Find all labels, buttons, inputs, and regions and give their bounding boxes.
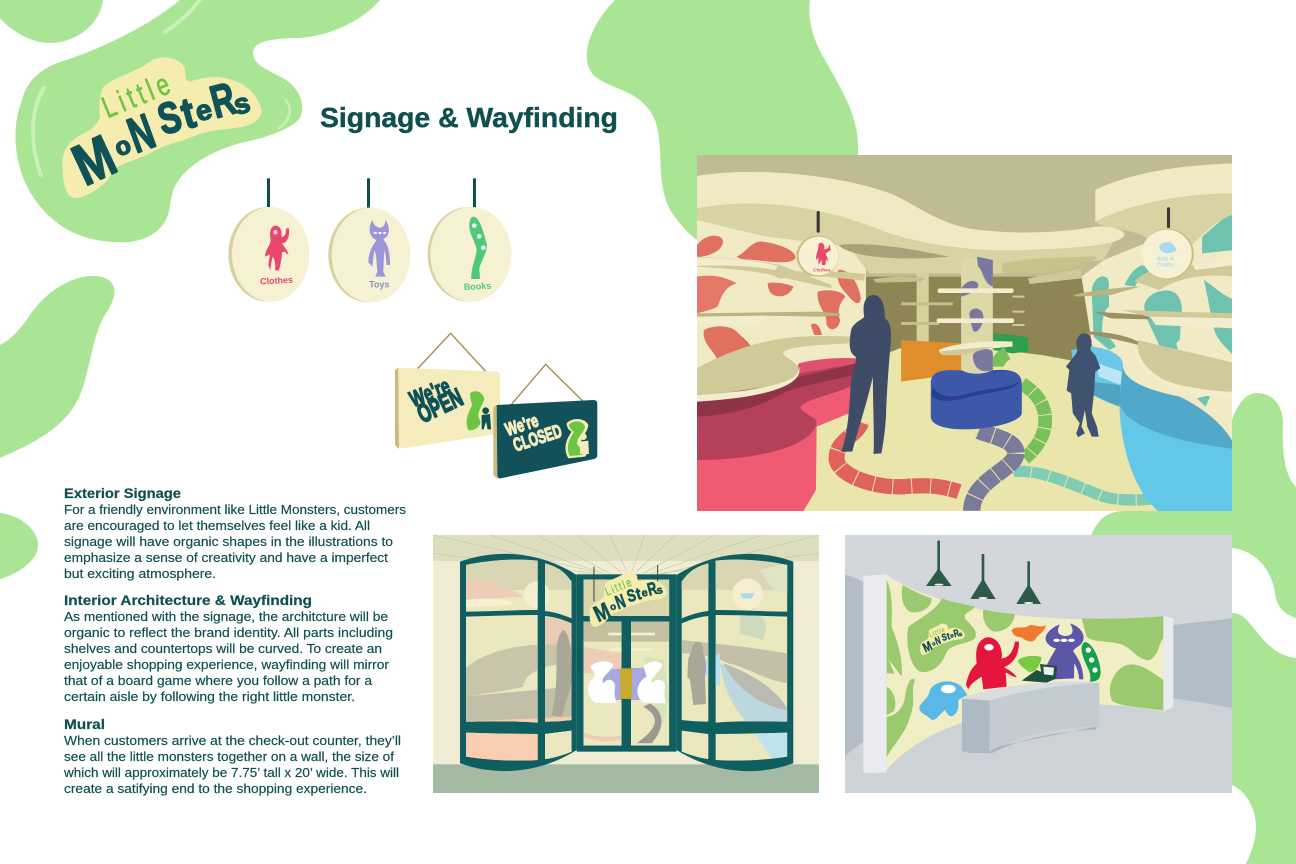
body: Mural: When customers arrive at the check-out counter, they’ll: [64, 734, 401, 748]
right countertop: [1135, 340, 1235, 398]
wayfinding path: green: [997, 353, 1045, 458]
logo: Little Monsters: e: [192, 93, 215, 128]
ceiling rays: [433, 535, 819, 575]
storefront logo sign: Little: [603, 576, 634, 599]
body: Interior Architecture & Wayfinding: [64, 610, 393, 704]
green block: [994, 333, 1028, 353]
title: Signage & Wayfinding: [320, 102, 618, 133]
body: Mural: create a satifying end to the shopping experience.: [64, 782, 367, 796]
sign: We're Open: [395, 333, 500, 449]
pendant lamps: [926, 541, 1041, 604]
sign: Toys: Toys: [369, 279, 389, 289]
mural logo: Little: [929, 627, 946, 639]
mural logo: t: [946, 631, 951, 642]
mural logo: o: [931, 641, 937, 648]
sign: Arts and Crafts interior: Arts &: [1156, 257, 1174, 263]
heading: Mural: Mural: [64, 716, 105, 732]
door frame: [577, 574, 677, 752]
mural logo: R: [952, 627, 961, 639]
storefront logo sign: [589, 572, 667, 627]
sign: Books: Books: [464, 281, 491, 292]
mural logo: S: [940, 631, 948, 643]
left window frame: [460, 554, 577, 771]
mural green blobs: [887, 580, 1163, 757]
back columns: [917, 272, 929, 342]
body: Exterior Signage: emphasize a sense of creativity and have a imperfect: [64, 551, 389, 565]
body: Mural: see all the little monsters together on a wall, the size of: [64, 750, 395, 764]
right pillar: [1163, 616, 1173, 712]
panel: storefront: [430, 530, 823, 798]
back shelves: [901, 302, 953, 325]
storefront logo sign: s: [655, 584, 664, 597]
monster: red: [966, 637, 1019, 689]
white door monsters right: [637, 661, 666, 703]
storefront logo sign: S: [625, 586, 638, 607]
tentacle monster eyes: [1086, 647, 1098, 673]
mural logo: s: [958, 631, 964, 638]
logo: Little Monsters: M: [63, 123, 126, 199]
panel: store interior: [697, 150, 1235, 513]
hanging round signs: [228, 178, 512, 302]
door handle: [620, 668, 632, 699]
body: Exterior Signage: are encouraged to let themselves feel like a kid. All: [64, 519, 370, 533]
body: Interior Architecture & Wayfinding: organic to reflect the brand identity. All parts including: [64, 626, 393, 640]
mural logo: M: [920, 638, 935, 656]
body: Interior Architecture & Wayfinding: certain aisle by following the right little monster.: [64, 690, 355, 704]
hanging open / closed signs: [395, 333, 597, 479]
text block: Exterior Signage: [64, 485, 406, 581]
sign: Arts and Crafts interior: Crafts: [1157, 263, 1174, 269]
orange block: [901, 340, 962, 382]
wayfinding path: grey: [972, 431, 1016, 513]
blue monster eye: [941, 685, 956, 693]
body: Mural: which will approximately be 7.75’ tall x 20’ wide. This will: [63, 766, 399, 780]
left side wall: [845, 574, 865, 757]
sign: Clothes: [228, 178, 309, 302]
body: Interior Architecture & Wayfinding: As mentioned with the signage, the architcture will be: [64, 610, 388, 624]
right window interior view: [677, 550, 793, 777]
wall graphics: red blobs: [697, 236, 861, 360]
left countertop: [697, 336, 850, 402]
storefront logo sign: o: [609, 601, 618, 613]
text block: Interior Architecture & Wayfinding: [64, 592, 393, 704]
ceiling: [697, 155, 1232, 402]
storefront logo sign: e: [640, 587, 649, 600]
body: Mural: [63, 734, 401, 796]
column shelves: [937, 288, 1025, 355]
body: Exterior Signage: For a friendly environment like Little Monsters, customers: [64, 503, 406, 517]
silhouette: adult: [841, 295, 891, 454]
storefront logo sign: R: [645, 579, 659, 600]
left counter: [697, 358, 857, 513]
cream soffit: [697, 172, 1125, 250]
checkout counter: [962, 681, 1099, 753]
lamp three: [1016, 561, 1041, 604]
right shelves: [1073, 255, 1235, 345]
logo: Little Monsters: [62, 57, 262, 199]
white door monsters left: [588, 661, 617, 703]
wayfinding path: teal: [1012, 471, 1161, 500]
sign: Clothes interior: [796, 211, 839, 277]
logo: Little Monsters: R: [205, 73, 241, 128]
logo: Little Monsters: t: [176, 88, 200, 138]
blue display base: [931, 370, 1022, 429]
sign: We're Open: OPEN: [412, 382, 467, 429]
register: [1022, 664, 1057, 683]
right cream soffit: [1095, 163, 1235, 222]
lamp one: [926, 541, 952, 586]
floor: [433, 764, 819, 793]
right window frame: [677, 554, 793, 771]
monster: small green: [1018, 656, 1042, 672]
heading: Interior Architecture & Wayfinding: Interior Architecture & Wayfinding: [64, 592, 312, 608]
sign: Clothes: Clothes: [260, 275, 293, 287]
purple monster eyes: [1053, 639, 1075, 642]
monster: green tentacle: [1082, 642, 1101, 682]
storefront logo sign: t: [634, 585, 644, 604]
left shelves: [697, 256, 866, 317]
sign: We're Closed: CLOSED: [511, 421, 565, 456]
sign: Books: [428, 178, 512, 302]
blob highlights: [33, 0, 290, 175]
left pillar: [863, 574, 887, 773]
body: Exterior Signage: signage will have organic shapes in the illustrations to: [64, 535, 393, 549]
storefront logo sign: M: [590, 598, 614, 627]
sign: Clothes interior: Clothes: [813, 267, 831, 273]
body: Exterior Signage: [64, 503, 406, 581]
red monster eye: [984, 644, 994, 651]
right side wall: [1173, 618, 1232, 708]
body: Exterior Signage: but exciting atmosphere.: [64, 567, 216, 581]
mural logo: N: [933, 634, 943, 648]
logo: Little Monsters: Little: [97, 67, 175, 125]
text block: Mural: [63, 716, 401, 796]
right wall: [1082, 220, 1232, 440]
door interior view: [583, 579, 669, 746]
left window interior view: [460, 550, 577, 777]
ceiling soffit undersides: [697, 203, 1114, 273]
body: Interior Architecture & Wayfinding: enjoyable shopping experience, wayfinding will mirror: [64, 658, 389, 672]
wall graphics: teal blobs: [1092, 214, 1232, 354]
ceiling: [840, 530, 1240, 800]
floor: [804, 348, 1158, 511]
ceiling: [433, 535, 819, 561]
mural logo: e: [949, 632, 955, 640]
silhouette: child: [1066, 333, 1100, 437]
mural logo: [920, 624, 965, 656]
logo: Little Monsters: N: [121, 103, 162, 163]
body: Interior Architecture & Wayfinding: shelves and countertops will be curved. To create an: [64, 642, 382, 656]
right counter: [1071, 347, 1235, 513]
wall: [430, 561, 823, 765]
sign: We're Open: We're: [406, 373, 454, 413]
mural wall: [887, 575, 1163, 770]
monster: purple: [1044, 623, 1084, 679]
left wall: [697, 220, 866, 368]
heading: Exterior Signage: Exterior Signage: [64, 485, 181, 501]
lamp two: [970, 554, 996, 599]
door and window bars: [622, 622, 631, 746]
sign: We're Closed: We're: [503, 411, 541, 440]
logo: Little Monsters: s: [230, 87, 254, 122]
sign: Arts and Crafts interior: [1141, 207, 1194, 279]
wayfinding path: red: [837, 422, 959, 492]
sign rods: [594, 565, 658, 602]
storefront logo sign: N: [613, 591, 628, 614]
sign: Toys: [328, 178, 410, 302]
panel: mural: [840, 530, 1240, 800]
back wall: [866, 276, 1092, 360]
monster: orange: [1012, 625, 1046, 641]
logo: Little Monsters: o: [111, 131, 135, 162]
body: Interior Architecture & Wayfinding: that of a board game where you follow a path for a: [64, 674, 372, 688]
logo: Little Monsters: S: [153, 92, 187, 145]
floor: [845, 696, 1232, 797]
sign: We're Closed: [493, 364, 597, 479]
monster: blue: [919, 681, 967, 720]
patterned column: [961, 257, 993, 374]
